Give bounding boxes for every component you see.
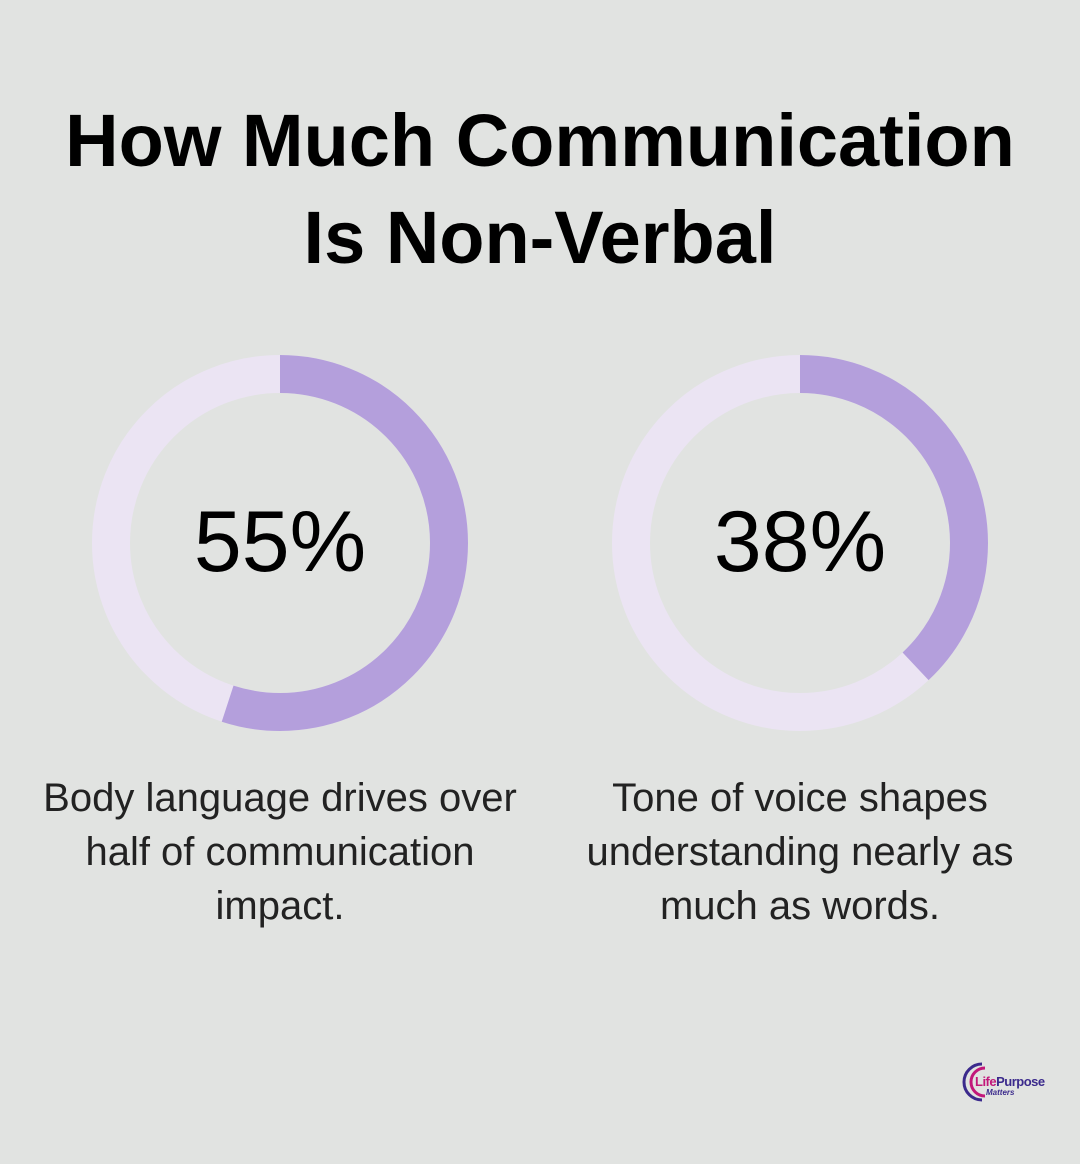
caption: tone of voice: much as words. [660,884,940,928]
caption: tone of voice: understanding nearly as [587,830,1013,874]
title [65,99,1015,279]
caption: body language: Body language drives over [43,776,517,820]
chart: 55% ring: 55% [194,494,366,590]
logo: Matters [986,1088,1014,1097]
chart: 55% ring [92,355,468,731]
logo [962,1062,1045,1102]
caption: body language [43,776,517,928]
logo: LifePurpose [975,1074,1045,1089]
caption: tone of voice [587,776,1013,928]
chart: 38% ring [612,355,988,731]
chart: 38% ring: 38% [714,494,886,590]
title: Is Non-Verbal [304,196,776,279]
caption: body language: half of communication [85,830,475,874]
title: How Much Communication [65,99,1015,182]
caption: tone of voice: Tone of voice shapes [612,776,988,820]
caption: body language: impact. [216,884,344,928]
